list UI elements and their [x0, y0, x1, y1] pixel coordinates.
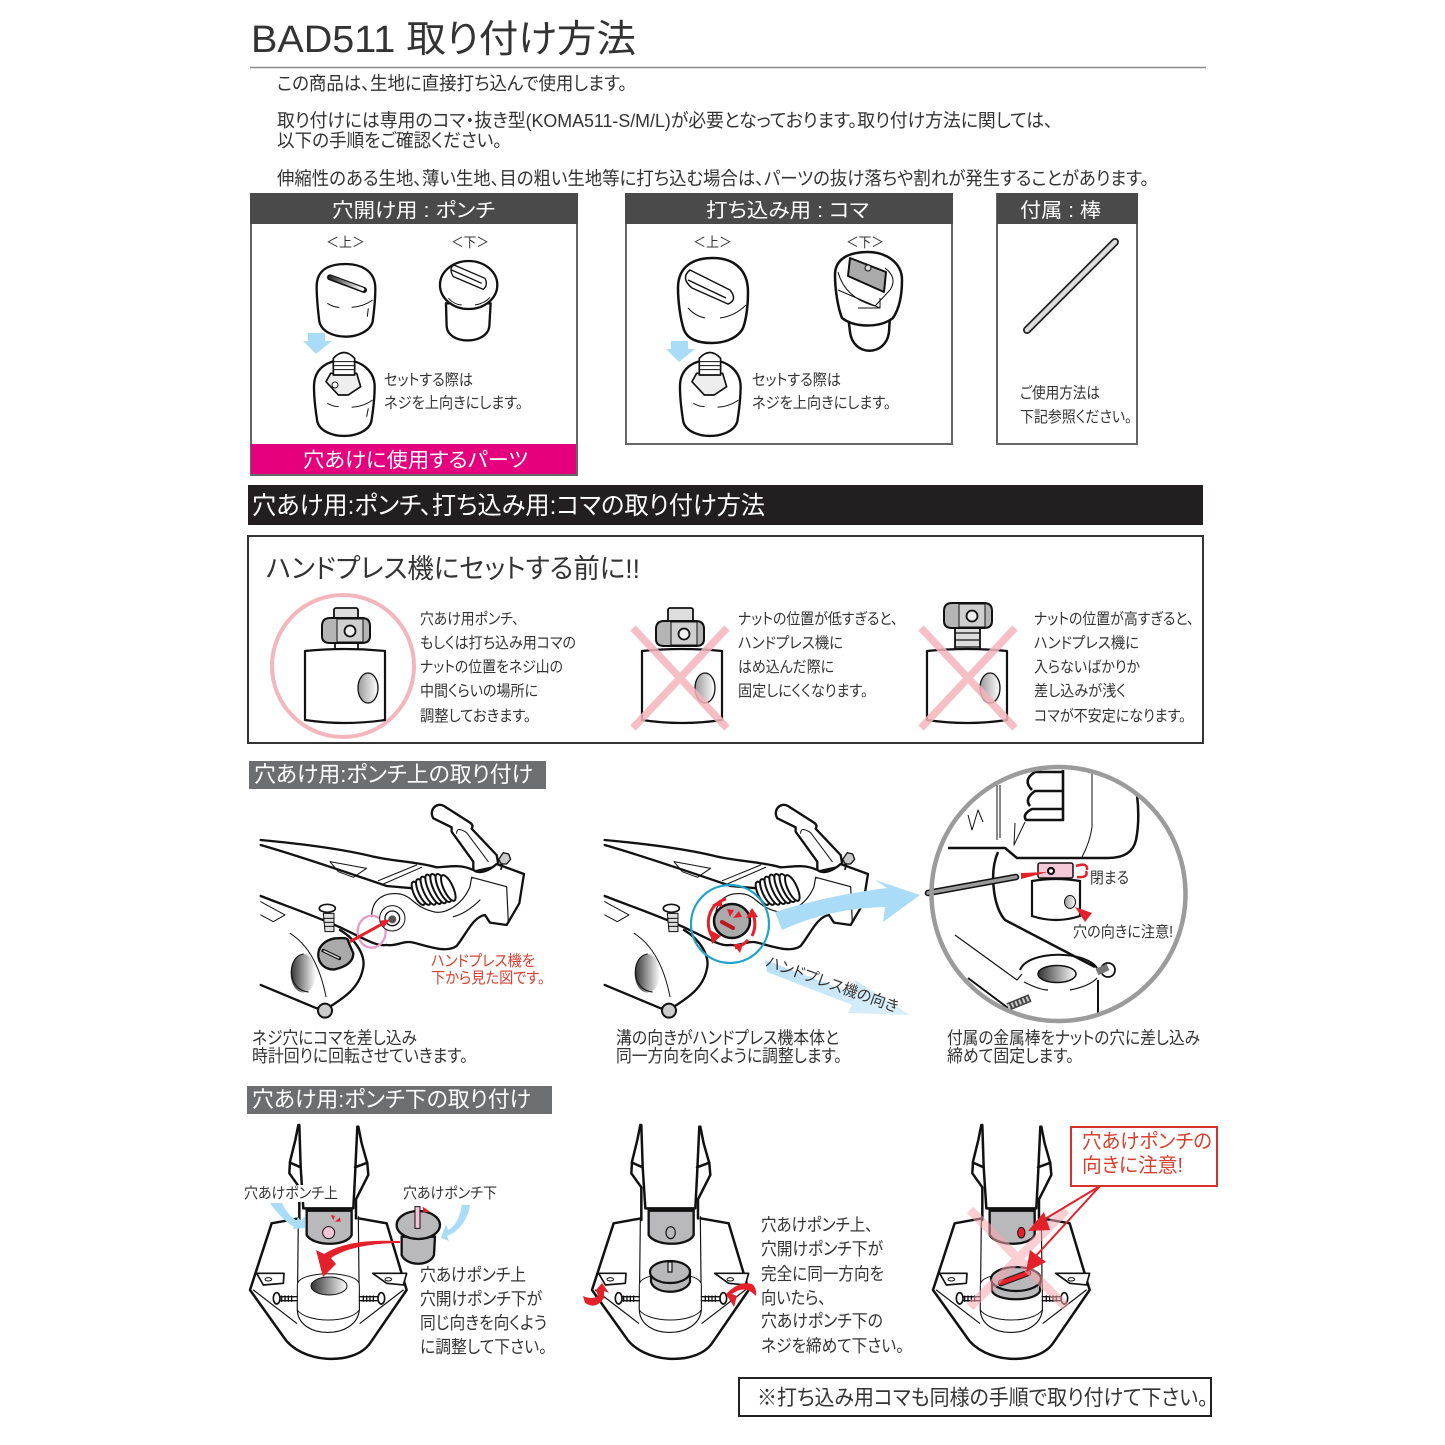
callout: mind direction: 穴あけポンチの	[1082, 1130, 1212, 1153]
text: nut too high: コマが不安定になります。	[1034, 707, 1186, 725]
text: align directions: に調整して下さい。	[420, 1337, 547, 1357]
label: lower punch: 穴あけポンチ下	[403, 1185, 497, 1202]
tab heading: punch lower mounting: 穴あけ用:ポンチ下の取り付け	[252, 1087, 531, 1112]
intro text: 取り付けには専用のコマ・抜き型(KOMA511-S/M/L)が必要となっております。取り付け方法に関しては、	[277, 110, 1053, 131]
caption: step 1: ネジ穴にコマを差し込み	[252, 1028, 417, 1048]
labels upper lower die: ＜上＞	[693, 235, 732, 250]
arrow: down to die nut cylinder	[666, 341, 695, 362]
callout lines	[1026, 1186, 1100, 1272]
icon: punch and red arrow	[318, 906, 405, 969]
diagram: insert punch into screw hole	[261, 805, 545, 1018]
text: correct nut position: 穴あけ用ポンチ、	[420, 610, 519, 628]
text: align directions: 穴あけポンチ上	[420, 1265, 526, 1285]
diagram: tighten lower punch screws	[583, 1125, 904, 1359]
text: tighten screws: 向いたら、	[761, 1288, 826, 1308]
diagram: tighten with rod, detail circle	[928, 765, 1186, 1021]
caption: step 3: 締めて固定します。	[947, 1046, 1074, 1066]
text: set instruction: セットする際は	[384, 371, 473, 389]
cross mark	[970, 1210, 1066, 1307]
caption: step 3	[947, 1028, 1200, 1066]
labels upper lower die	[693, 235, 884, 250]
callout: mind direction: 向きに注意!	[1082, 1154, 1183, 1177]
label: upper punch: 穴あけポンチ上	[244, 1185, 338, 1202]
intro text: この商品は、生地に直接打ち込んで使用します。	[277, 73, 627, 94]
text: nut too high: 入らないばかりか	[1034, 658, 1140, 676]
labels upper lower: ＜下＞	[451, 235, 489, 250]
text: nut too high	[1034, 610, 1194, 725]
note: viewed from below: 下から見た図です。	[431, 969, 545, 987]
diagram: position lower punch	[244, 1125, 547, 1359]
text: see below: 下記参照ください。	[1020, 408, 1132, 426]
tab heading: punch upper mounting: 穴あけ用:ポンチ上の取り付け	[254, 762, 533, 787]
icon: lower punch with red slot	[991, 1267, 1041, 1299]
labels upper lower: ＜上＞	[326, 235, 365, 250]
text: nut too low: ナットの位置が低すぎると、	[738, 610, 898, 628]
text: correct nut position: ナットの位置をネジ山の	[420, 658, 563, 676]
arrow: blue to upper punch	[270, 1203, 306, 1229]
text: nut too high: 差し込みが浅く	[1034, 682, 1126, 700]
text: nut too low: 固定しにくくなります。	[738, 682, 868, 700]
panel: before setting in hand press	[248, 536, 1203, 743]
caption: step 1: 時計回りに回転させていきます。	[252, 1046, 468, 1066]
text: tighten screws	[761, 1215, 904, 1356]
caption: step 1	[252, 1028, 468, 1066]
icon: nut too high	[921, 603, 1015, 728]
icon: rod in detail	[928, 877, 1016, 893]
icon: die upper with nut	[680, 352, 741, 436]
icon: punch upper with nut	[314, 352, 375, 436]
section heading band	[248, 485, 1203, 525]
text: see below	[1020, 384, 1132, 426]
icon: die upper	[678, 258, 748, 343]
text: tighten screws: ネジを締めて下さい。	[761, 1336, 904, 1356]
note: viewed from below	[431, 952, 545, 987]
red arrows: rod and hole	[1021, 865, 1092, 922]
labels upper lower die: ＜下＞	[846, 235, 884, 250]
intro text: 以下の手順をご確認ください。	[277, 130, 502, 151]
text: press direction: ハンドプレス機の向き	[764, 953, 901, 1016]
arrow: to detail view	[775, 880, 920, 930]
text: die set instruction: ネジを上向きにします。	[752, 394, 891, 412]
panel heading: punch: 穴開け用 : ポンチ	[332, 199, 495, 222]
panel: setting die parts	[625, 193, 953, 444]
icon: nut and cylinder	[1032, 863, 1080, 920]
arrow: blue to lower punch	[441, 1205, 470, 1241]
text: set instruction: ネジを上向きにします。	[384, 394, 523, 412]
text: nut too low: ハンドプレス機に	[738, 634, 843, 652]
text: align directions	[420, 1265, 547, 1357]
text: nut too low: はめ込んだ際に	[738, 658, 834, 676]
caption: step 2: 同一方向を向くように調整します。	[616, 1046, 842, 1066]
banner: parts for hole punching	[251, 444, 576, 474]
icon: punch with rotation arrows	[691, 885, 769, 963]
text: nut too low	[738, 610, 898, 700]
intro text	[277, 73, 1149, 189]
icon: metal rod	[1027, 242, 1115, 330]
text: mind hole direction: 穴の向きに注意!	[1073, 923, 1173, 941]
text: correct nut position: 調整しておきます。	[420, 707, 531, 725]
caption: step 3: 付属の金属棒をナットの穴に差し込み	[947, 1028, 1200, 1048]
panel: accessory rod	[997, 193, 1138, 444]
text: tighten screws: 穴開けポンチ下が	[761, 1239, 884, 1259]
text: die set instruction	[752, 371, 891, 412]
panel heading: koma: 打ち込み用 : コマ	[706, 199, 869, 222]
text: set instruction	[384, 371, 523, 412]
arrow: down to nut cylinder	[303, 333, 332, 354]
icon: upper punch with red hole	[990, 1211, 1035, 1244]
icon: punch lower	[440, 261, 497, 340]
note: viewed from below: ハンドプレス機を	[431, 952, 535, 970]
panel heading: rod: 付属 : 棒	[1020, 199, 1101, 222]
diagram: align groove direction	[605, 805, 920, 1018]
panel: hole punch parts	[250, 193, 578, 475]
text: correct nut position: もしくは打ち込み用コマの	[420, 634, 576, 652]
text: closes: 閉まる	[1090, 870, 1129, 887]
icon: punch upper	[317, 264, 375, 337]
text: nut too high: ナットの位置が高すぎると、	[1034, 610, 1194, 628]
text: tighten screws: 穴あけポンチ下の	[761, 1311, 883, 1331]
text: align directions: 穴開けポンチ下が	[420, 1289, 543, 1309]
icon: nut too low	[633, 608, 727, 728]
icon: upper punch aligned	[649, 1211, 694, 1244]
text: see below: ご使用方法は	[1020, 384, 1100, 402]
callout: mind direction	[1071, 1127, 1217, 1186]
diagram: wrong punch direction	[933, 1125, 1217, 1359]
text: align directions: 同じ向きを向くよう	[420, 1313, 547, 1333]
icon: die lower	[835, 252, 902, 351]
icon: lower punch part	[397, 1207, 440, 1264]
title: BAD511 取り付け方法	[251, 19, 636, 61]
footer note	[739, 1378, 1211, 1416]
labels upper lower	[326, 235, 489, 250]
section heading band: 穴あけ用:ポンチ、打ち込み用:コマの取り付け方法	[252, 492, 765, 520]
panel heading: ハンドプレス機にセットする前に!!	[266, 554, 640, 584]
footer note: ※打ち込み用コマも同様の手順で取り付けて下さい。	[757, 1386, 1208, 1410]
panel: hole punch parts: 穴あけに使用するパーツ	[303, 449, 528, 472]
text: die set instruction: セットする際は	[752, 371, 841, 389]
arrow: press direction	[765, 960, 910, 1015]
caption: step 2: 溝の向きがハンドプレス機本体と	[616, 1028, 839, 1048]
text: tighten screws: 完全に同一方向を	[761, 1264, 884, 1284]
text: nut too high: ハンドプレス機に	[1034, 634, 1139, 652]
icon: upper punch with hole	[307, 1211, 352, 1244]
intro text: 伸縮性のある生地、薄い生地、目の粗い生地等に打ち込む場合は、パーツの抜け落ちや割れが発生することがあります。	[277, 168, 1149, 189]
text: tighten screws: 穴あけポンチ上、	[761, 1215, 873, 1235]
icon: lower punch in boss	[650, 1261, 690, 1292]
arrow: red to boss	[316, 1241, 400, 1277]
text: correct nut position: 中間くらいの場所に	[420, 682, 538, 700]
icon: boss hole	[311, 1277, 347, 1295]
caption: step 2	[616, 1028, 842, 1066]
icon: correct nut position	[272, 595, 414, 737]
icon: red tighten arrows	[583, 1283, 756, 1307]
text: correct nut position	[420, 610, 576, 725]
